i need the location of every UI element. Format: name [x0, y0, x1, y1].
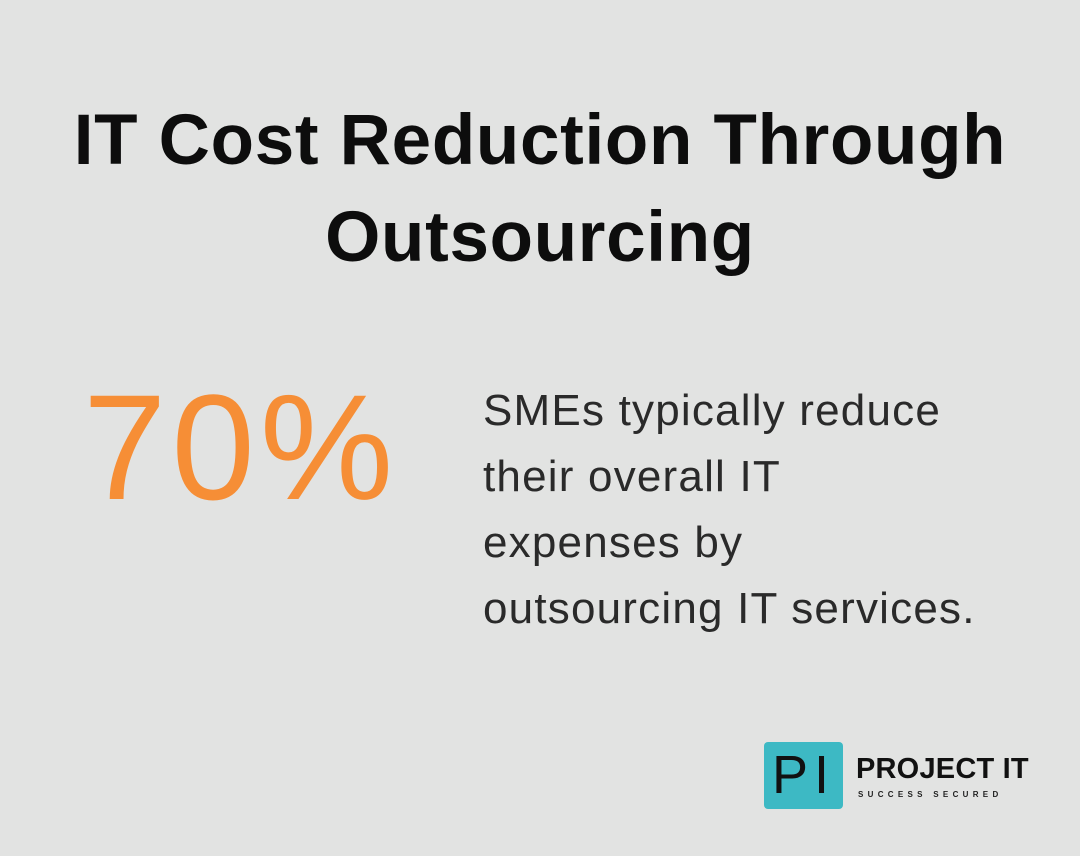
logo tagline: SUCCESS SECURED	[858, 790, 1003, 799]
logo	[764, 742, 1029, 809]
big stat: 70%	[83, 363, 398, 531]
title: Outsourcing	[325, 198, 755, 277]
description text: SMEs typically reduce	[483, 386, 941, 435]
icon: PI box: PI	[772, 745, 835, 805]
title	[74, 101, 1006, 277]
description text: outsourcing IT services.	[483, 584, 976, 633]
description text: their overall IT	[483, 452, 781, 501]
title: IT Cost Reduction Through	[74, 101, 1006, 180]
logo name: PROJECT IT	[856, 753, 1029, 785]
description text: expenses by	[483, 518, 743, 567]
description text	[483, 386, 976, 633]
